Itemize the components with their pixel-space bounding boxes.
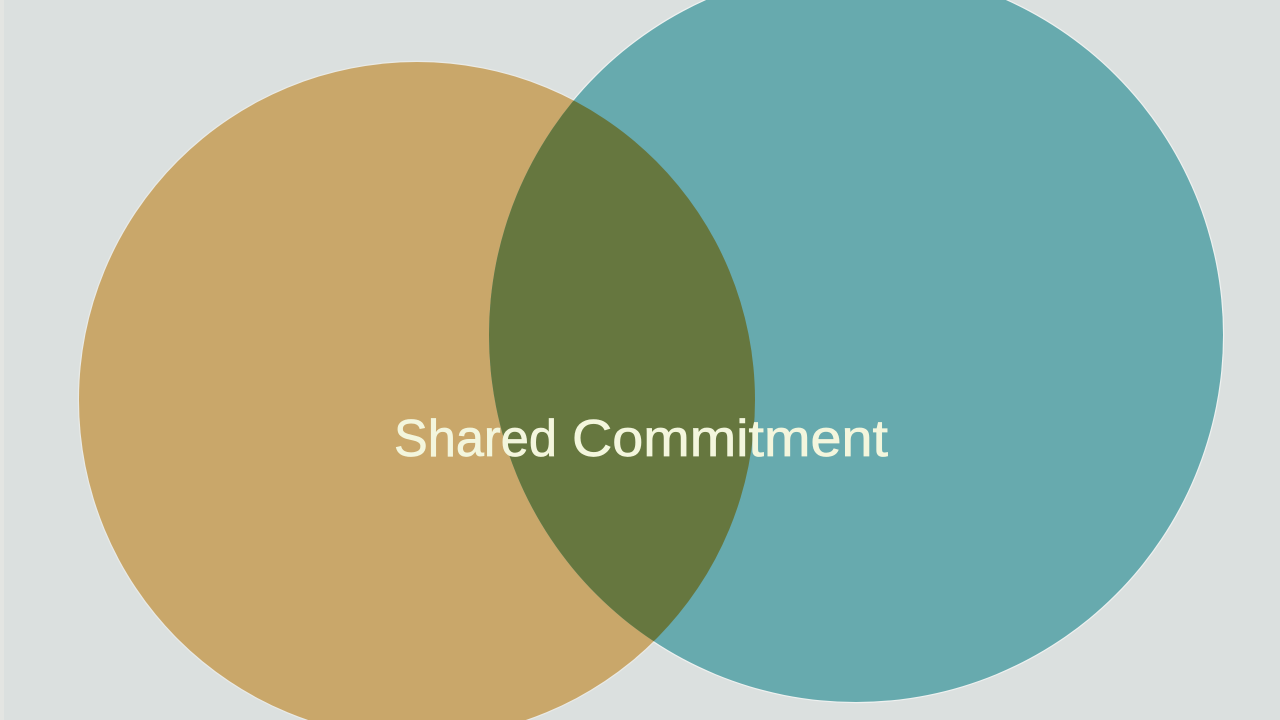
label: Shared Commitment: Shared	[394, 410, 557, 468]
overlap region	[489, 100, 755, 642]
circle: right teal	[489, 0, 1223, 702]
circle: left ochre	[79, 62, 755, 720]
label: Shared Commitment: Commitment	[572, 410, 889, 468]
